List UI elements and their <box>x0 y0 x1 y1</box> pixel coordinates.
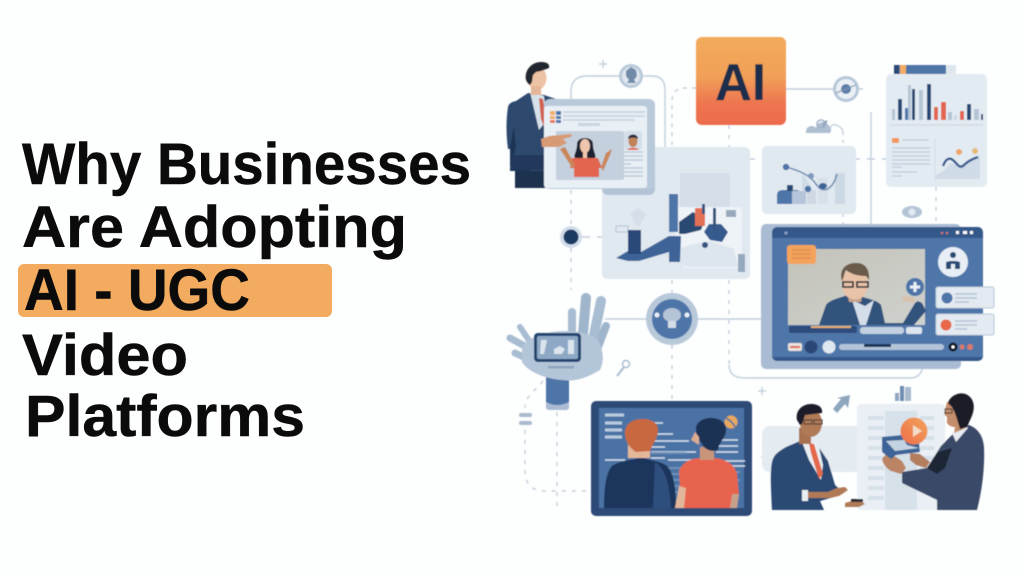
figure: robotic hand with screen and handle <box>510 298 606 410</box>
panel: map with 3D data shapes <box>602 147 750 279</box>
icon: eye node <box>902 206 922 218</box>
device and play button <box>882 418 928 459</box>
scene: business people with play button <box>762 386 984 510</box>
badge: AI <box>696 37 786 125</box>
connector lines <box>525 76 936 510</box>
viewer with orange hair <box>604 419 676 508</box>
presenter's pointing hand <box>541 134 572 147</box>
panel: tablet with video call <box>544 99 655 195</box>
icon: dark connector node <box>560 226 582 248</box>
icon: user avatar node <box>619 64 643 88</box>
video frame: man with glasses <box>788 249 926 325</box>
icon: mini bar chart <box>895 386 911 401</box>
icon: equals connector <box>519 413 532 425</box>
comment card 1 <box>936 287 994 308</box>
panel: report with bar chart and line chart <box>886 65 987 187</box>
figure: right man with glasses <box>882 393 984 510</box>
avatar circle <box>938 247 968 277</box>
video frame: woman presenter <box>556 131 624 180</box>
title: Why Businesses Are Adopting AI-UGC Video Platforms: AI - UGC <box>24 258 250 323</box>
icon: central hub node <box>646 293 698 345</box>
comment card 2 <box>936 314 994 335</box>
title: Why Businesses Are Adopting AI-UGC Video Platforms: Platforms <box>25 384 305 449</box>
icon: growth arrow <box>833 395 850 413</box>
title: Why Businesses Are Adopting AI-UGC Video Platforms: Are Adopting <box>22 195 407 260</box>
title: Why Businesses Are Adopting AI-UGC Video Platforms <box>18 132 471 449</box>
icon: key <box>617 360 630 376</box>
illustration: connected AI video platform scene <box>506 37 994 516</box>
viewer in red shirt <box>675 418 739 508</box>
highlight bar behind AI-UGC <box>18 264 332 317</box>
icon: network target node <box>833 76 859 102</box>
figure: left man with red tie <box>771 404 865 510</box>
title: Why Businesses Are Adopting AI-UGC Video Platforms: Why Businesses <box>22 132 471 197</box>
controls row <box>788 326 973 354</box>
badge: AI: AI <box>715 54 766 112</box>
panel: main video player <box>761 224 994 369</box>
figure: man in suit presenting <box>506 62 556 188</box>
bar chart <box>892 84 983 120</box>
profile thumbnail <box>624 131 642 150</box>
icon: plus marks <box>599 60 766 395</box>
title: Why Businesses Are Adopting AI-UGC Video Platforms: Video <box>22 323 188 388</box>
panel: monitor with two viewers <box>591 401 752 516</box>
line chart <box>936 148 980 179</box>
overlay note <box>787 245 816 264</box>
icon: cloud with lock <box>806 120 831 133</box>
panel: line and area chart <box>762 146 856 214</box>
